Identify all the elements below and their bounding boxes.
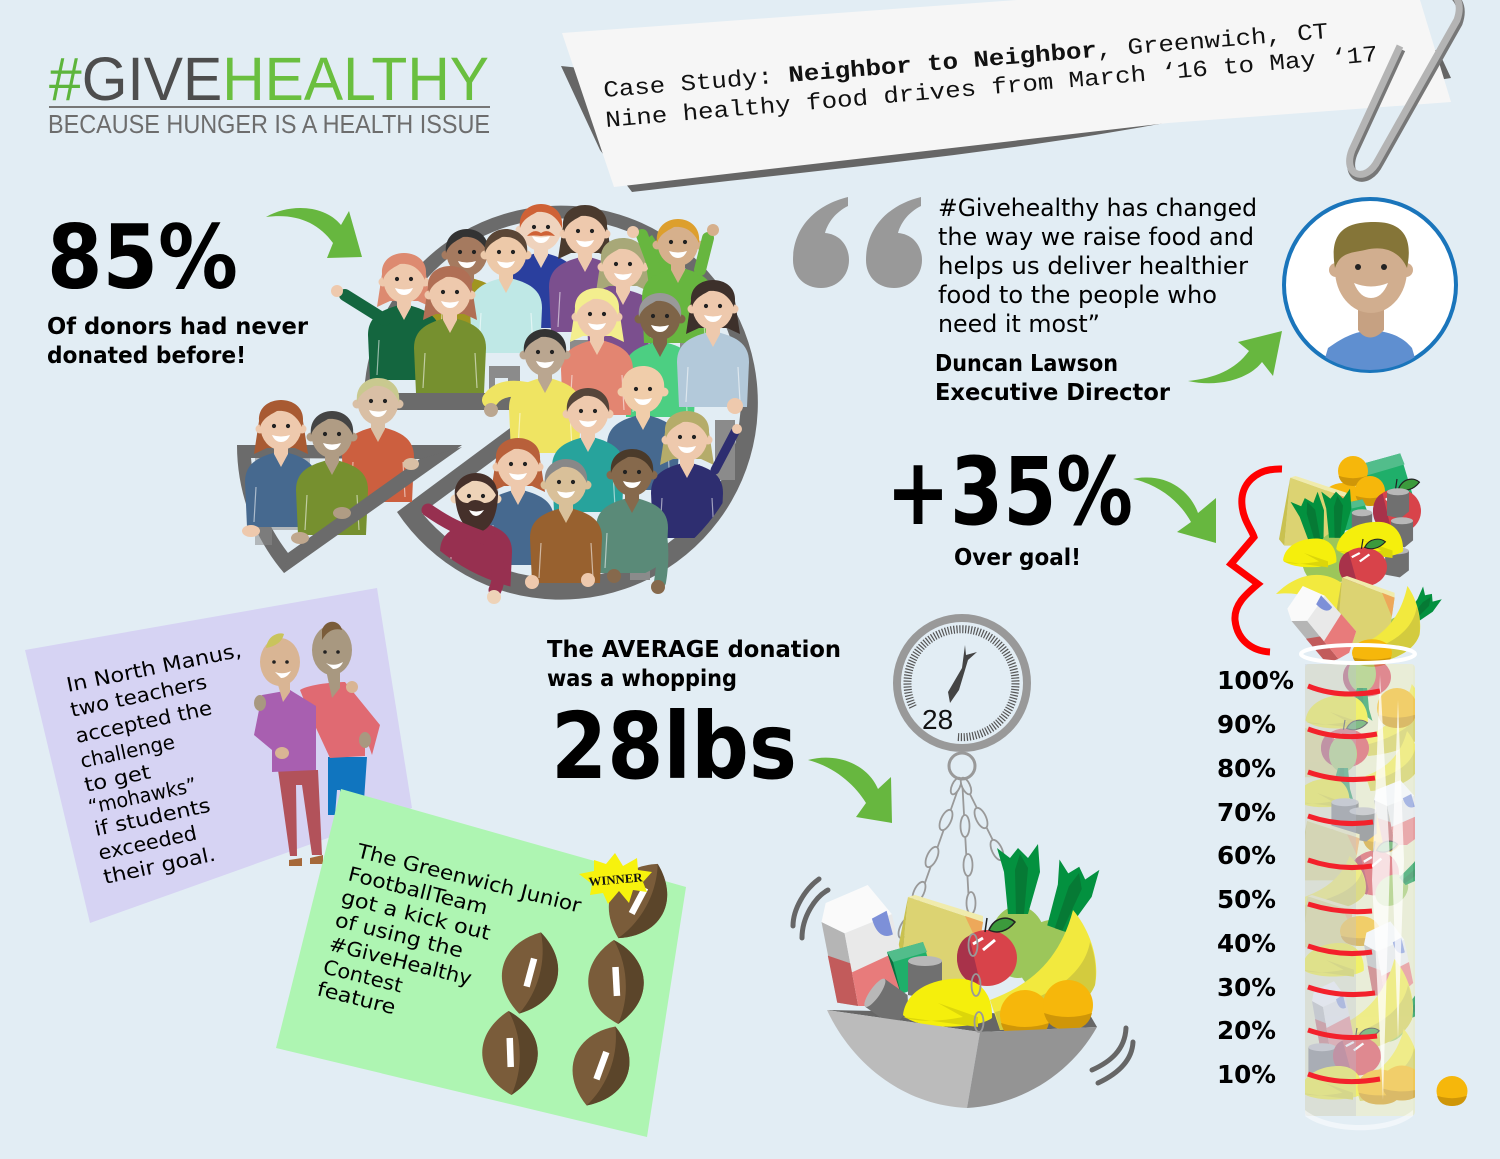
stat: 85%: 85% — [47, 206, 238, 309]
card text: of using the — [333, 908, 466, 963]
portrait: Duncan Lawson — [1284, 199, 1456, 375]
quote mark — [793, 197, 922, 288]
jar percent scale labels: 70% — [1217, 798, 1276, 827]
card text: In North Manus, — [64, 638, 243, 697]
chains — [896, 776, 1025, 1030]
card text: The Greenwich Junior — [354, 838, 585, 918]
pie main ring — [364, 206, 758, 600]
jar percent scale labels: 20% — [1217, 1016, 1276, 1045]
people in main pie — [368, 204, 749, 597]
jar percent scale labels: 10% — [1217, 1060, 1276, 1089]
pie slice ring — [237, 445, 462, 573]
quote attribution — [935, 351, 1171, 406]
quote attribution: Executive Director — [935, 380, 1171, 406]
card text — [64, 638, 243, 889]
front chain — [968, 934, 984, 1032]
quote text — [938, 194, 1257, 338]
card text: FootballTeam — [346, 862, 490, 919]
case study note with paperclip — [561, 0, 1461, 192]
food inside jar — [1305, 664, 1415, 1116]
dial ring — [949, 753, 975, 779]
scale dial: 28 — [922, 704, 953, 735]
winner badge — [579, 853, 652, 904]
stat: +35%: +35% — [886, 438, 1133, 547]
bowl — [827, 1010, 980, 1108]
card text: “mohawks” — [86, 773, 199, 819]
motion lines — [793, 879, 1133, 1083]
average donation text: was a whopping — [547, 666, 737, 692]
stat: +35% — [886, 438, 1133, 571]
card: North Manus teachers — [25, 588, 412, 923]
raised arms and hands — [345, 235, 735, 590]
footballs — [481, 851, 682, 1115]
card text: challenge — [78, 729, 177, 773]
card text: to get — [82, 759, 153, 797]
logo: #GiveHealthy: #GIVEHEALTHY — [49, 45, 489, 113]
beard and mustache details — [455, 231, 555, 532]
quote text: need it most” — [938, 310, 1100, 338]
average donation text: The AVERAGE donation — [547, 637, 841, 663]
card text: two teachers — [68, 670, 209, 722]
jar percent scale labels: 100% — [1217, 666, 1294, 695]
pie chart of people — [237, 204, 758, 604]
jar percent scale labels: 60% — [1217, 841, 1276, 870]
slice hands — [242, 458, 419, 544]
jar measurement marks — [1308, 686, 1380, 1082]
quote text: helps us deliver healthier — [938, 252, 1248, 280]
slice front bar — [284, 447, 462, 573]
arrow: attribution to portrait — [1188, 331, 1282, 383]
icon: fallen orange — [1436, 1076, 1468, 1106]
jar percent scale labels: 30% — [1217, 973, 1276, 1002]
jar percent scale labels: 50% — [1217, 885, 1276, 914]
case study note with paperclip: Case Study: Neighbor to Neighbor , Greenwich, CT — [602, 19, 1329, 104]
jar percent scale labels: 80% — [1217, 754, 1276, 783]
jar percent scale labels: 40% — [1217, 929, 1276, 958]
card text — [315, 838, 585, 1019]
jar percent scale labels — [1217, 666, 1294, 1089]
card text: exceeded — [96, 821, 199, 865]
quote text: #Givehealthy has changed — [938, 194, 1257, 222]
quote text: the way we raise food and — [938, 223, 1254, 251]
stat: 85%: donated before! — [47, 343, 246, 369]
logo: #GiveHealthy: BECAUSE HUNGER IS A HEALTH ISSUE — [48, 109, 490, 139]
red brace: over goal — [1231, 469, 1282, 652]
bowl contents — [822, 844, 1107, 1040]
teachers illustration — [254, 622, 380, 866]
arrow: +35% to jar — [1133, 477, 1216, 543]
bench behind slice — [255, 458, 310, 545]
card text: Contest — [321, 955, 405, 997]
card text: feature — [315, 977, 398, 1019]
stat: 85%: Of donors had never — [47, 314, 309, 340]
people in slice — [245, 378, 414, 535]
hanging scale — [793, 618, 1133, 1108]
quote text: food to the people who — [938, 281, 1217, 309]
food pile above jar — [1276, 453, 1445, 670]
card text: accepted the — [73, 696, 214, 748]
card: Greenwich football team — [276, 789, 686, 1137]
average donation text: 28lbs — [551, 693, 797, 800]
stat: 85% — [47, 206, 309, 369]
bowl back rim — [827, 1010, 1097, 1032]
arrow: 28lbs to scale — [808, 758, 892, 823]
jar percent scale labels: 90% — [1217, 710, 1276, 739]
jar — [1301, 645, 1415, 1130]
winner badge: WINNER — [588, 870, 644, 889]
arrow: 85% to pie — [266, 208, 362, 258]
quote attribution: Duncan Lawson — [935, 351, 1118, 377]
card text: got a kick out — [339, 885, 493, 945]
average donation text — [547, 637, 841, 800]
card text: #GiveHealthy — [327, 932, 474, 990]
card text: if students — [92, 793, 212, 841]
benches behind people — [489, 328, 735, 580]
scale dial — [897, 618, 1027, 748]
case study note with paperclip: Nine healthy food drives from March ‘16 to May ‘17 — [604, 42, 1379, 134]
card text: their goal. — [101, 842, 218, 889]
stat: +35%: Over goal! — [954, 545, 1081, 571]
